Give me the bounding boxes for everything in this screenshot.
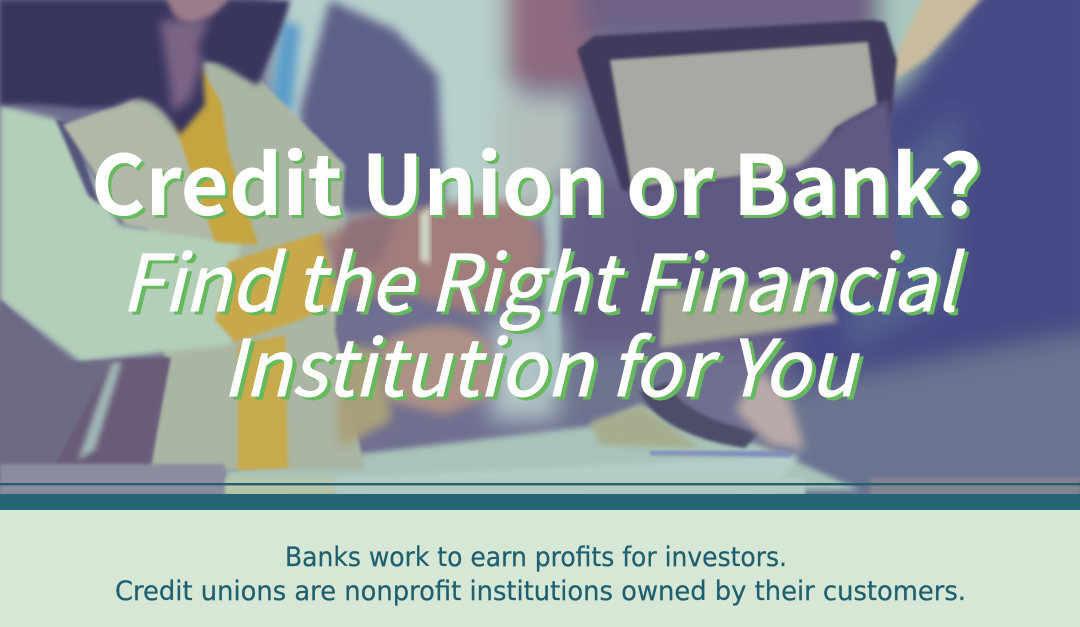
blonde hair (885, 0, 985, 85)
dark jacket lower left (0, 300, 170, 470)
line 1: Find the Right Financial (125, 225, 969, 337)
monitor stand (640, 382, 760, 448)
monitor screen (610, 42, 877, 190)
neck and chin (160, 20, 210, 112)
text block: intro copy (115, 542, 966, 607)
blurred office background (270, 0, 1080, 520)
lapel (63, 100, 215, 240)
monitor frame (577, 20, 897, 195)
lower hand (378, 325, 495, 415)
coat sleeve (0, 105, 240, 362)
line 2: Institution for You (226, 310, 864, 422)
blue stripe (270, 22, 300, 112)
title: italic subheading (121, 222, 969, 422)
line 2: Institution for You (222, 307, 860, 419)
curly hair (0, 0, 290, 135)
lower screen panel (660, 282, 838, 348)
yellow shirt and tie band (168, 65, 258, 245)
handshake (322, 200, 545, 312)
title: main heading: Credit Union or Bank? (94, 122, 985, 242)
band: teal rule lines (0, 483, 1080, 510)
panel: intro strip (0, 510, 1080, 627)
dark strap (55, 118, 100, 205)
hand at desk (735, 370, 805, 450)
text block: intro copy: Banks work to earn profits for investors. (285, 542, 787, 573)
yellow cord area (336, 345, 392, 448)
line 1: Find the Right Financial (121, 222, 965, 334)
text block: intro copy: Credit unions are nonprofit institutions owned by their customers. (115, 576, 966, 607)
lower band of photo (0, 464, 225, 495)
light strip behind hands (544, 195, 560, 395)
title: main heading: Credit Union or Bank? (91, 119, 982, 239)
suit arm over screen (628, 100, 900, 300)
coat body (130, 60, 365, 470)
yellow cuff (215, 232, 340, 342)
background suit (300, 0, 445, 215)
desk (225, 405, 860, 495)
